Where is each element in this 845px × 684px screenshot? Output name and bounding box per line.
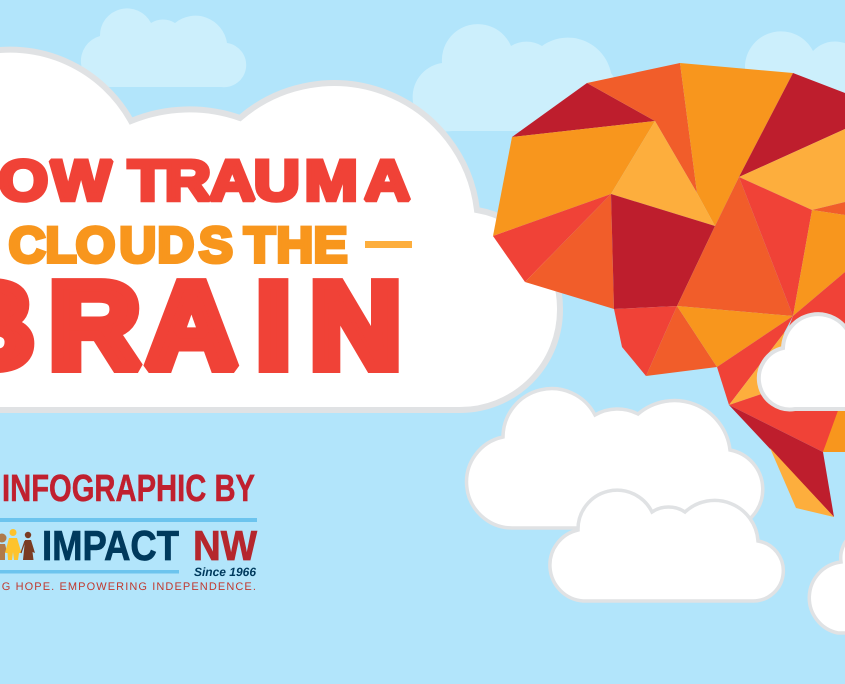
brain: low-poly facets <box>493 63 845 517</box>
icon: people chain <box>0 529 35 560</box>
logo wordmark: IMPACT: IMPACT <box>42 522 179 569</box>
cloud over brain: right <box>759 314 845 409</box>
lower cloud: small front <box>550 490 783 601</box>
logo: Impact NW <box>0 518 257 593</box>
title line 2: THE <box>244 217 347 273</box>
background cloud: top left <box>81 8 246 87</box>
lower cloud: bottom right <box>809 530 845 633</box>
main title cloud <box>0 50 560 410</box>
logo wordmark: NW: NW <box>193 522 257 569</box>
title: how trauma clouds the brain <box>0 149 412 394</box>
logo: since 1966: Since 1966 <box>194 565 256 579</box>
background cloud: top right <box>745 31 845 110</box>
title line 1 <box>0 149 410 213</box>
lower cloud: large <box>467 389 763 528</box>
title line 2 <box>9 217 412 273</box>
credit: infographic by: INFOGRAPHIC BY <box>2 468 255 510</box>
title line 1: TRAUMA <box>128 149 410 213</box>
title line 2: CLOUDS <box>9 217 233 273</box>
background cloud: top centre <box>413 24 650 131</box>
